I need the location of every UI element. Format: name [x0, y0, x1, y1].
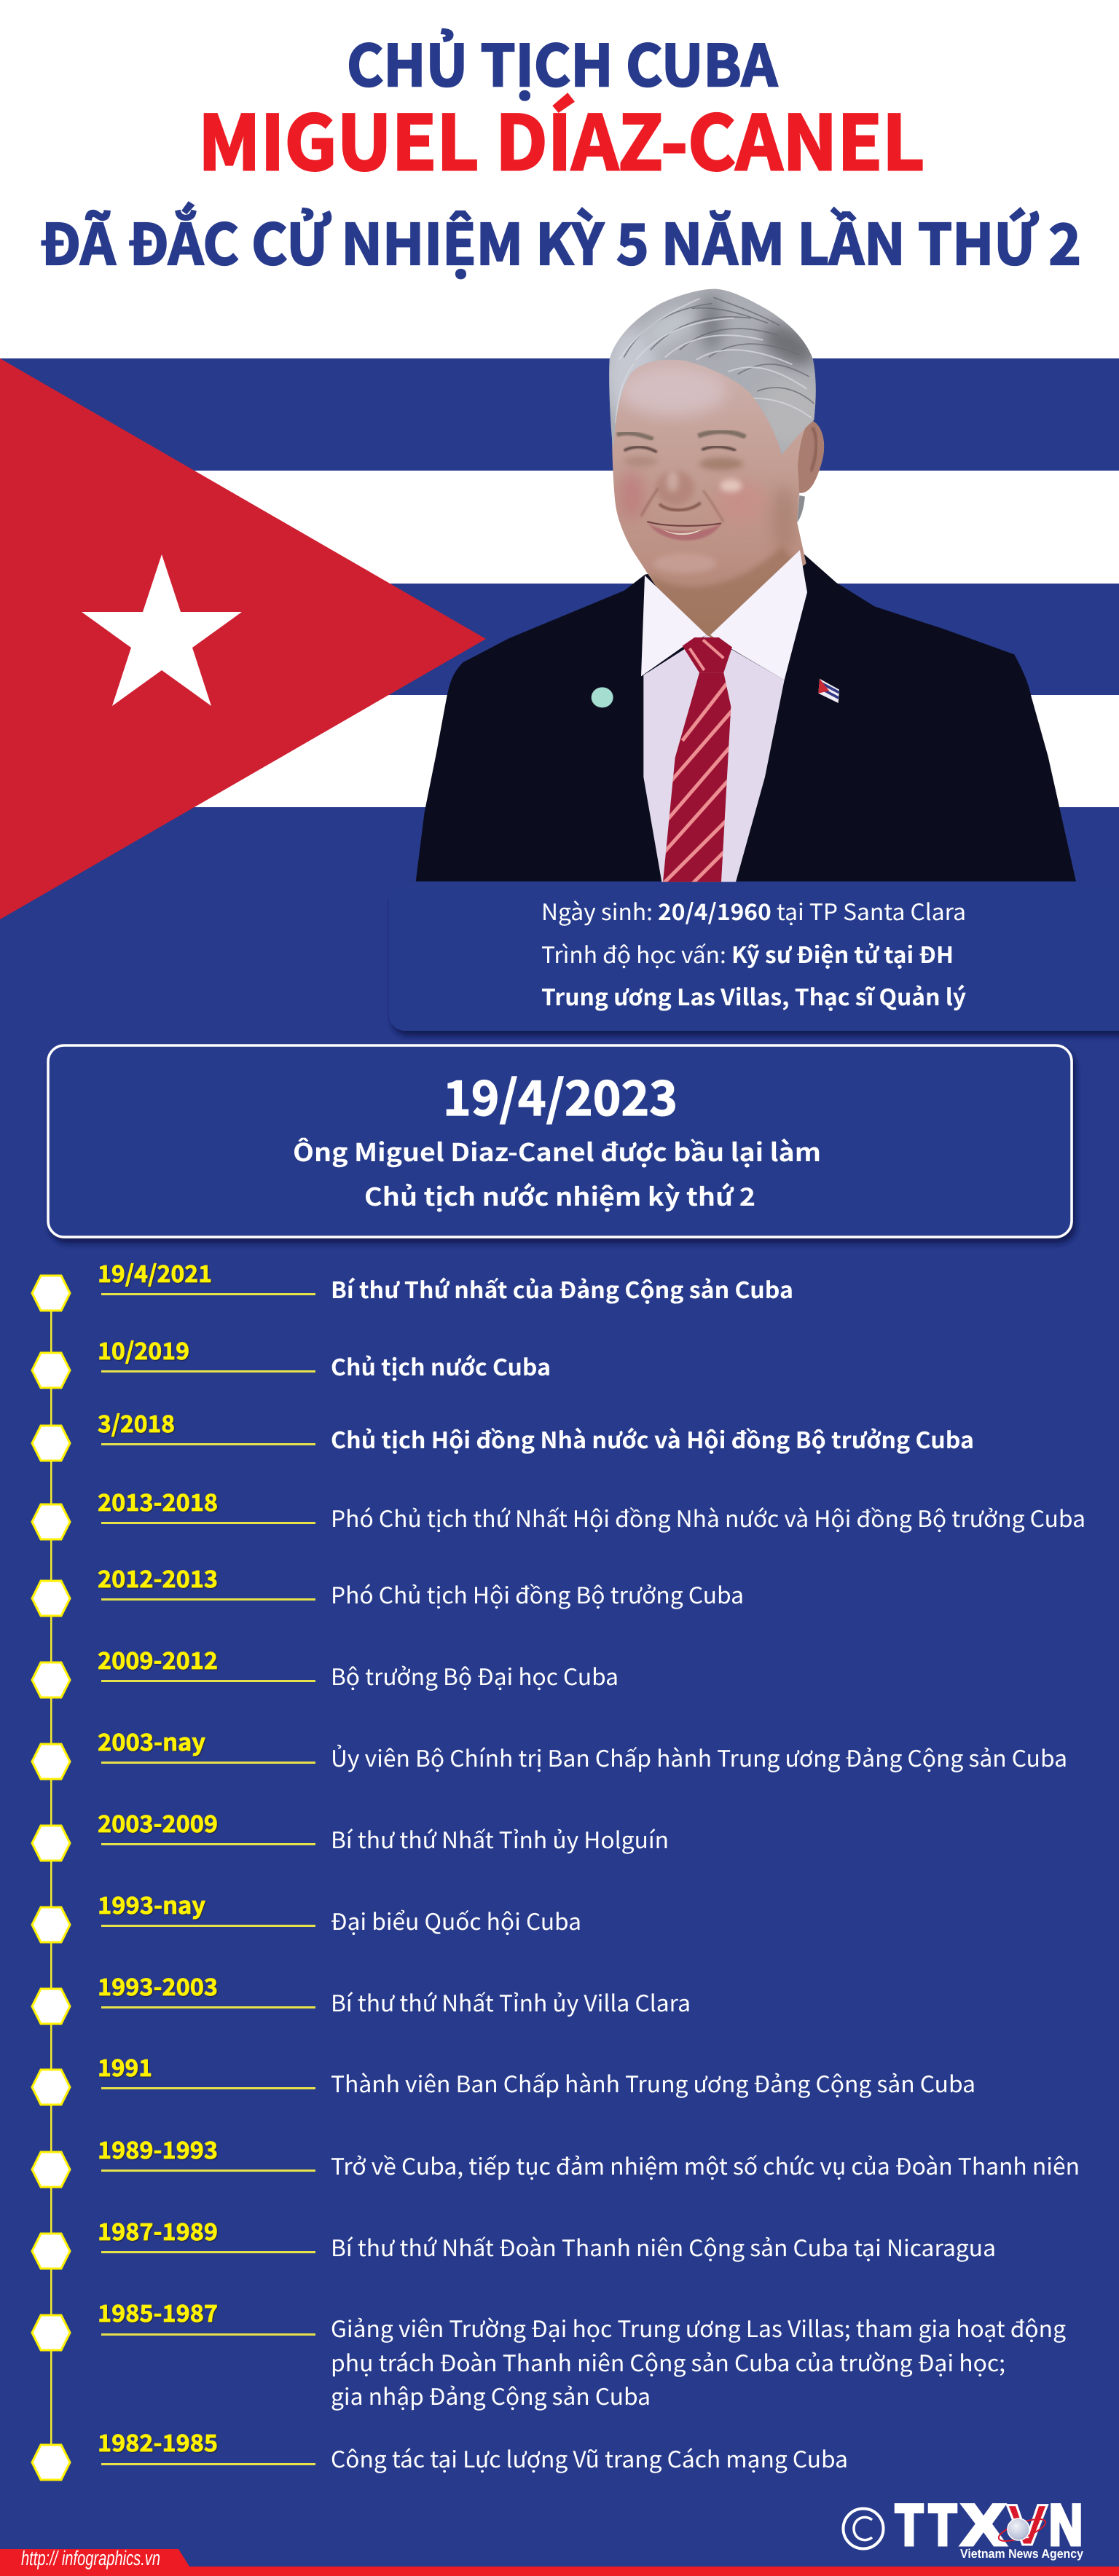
timeline item: 2009-2012 [32, 1643, 619, 1697]
timeline item: 1985-1987 [32, 2296, 1067, 2411]
tie [663, 672, 731, 882]
logo: TTXVN Vietnam News Agency [844, 2492, 1084, 2561]
timeline item: 19/4/2021: 19/4/2021 [98, 1256, 212, 1289]
wordmark: X [962, 2492, 1005, 2557]
eyes [624, 447, 657, 452]
suit jacket [416, 551, 1076, 881]
timeline item: 2003-nay: Ủy viên Bộ Chính trị Ban Chấp hành Trung ương Đảng Cộng sản Cuba [331, 1740, 1067, 1773]
highlight text line 2: Chủ tịch nước nhiệm kỳ thứ 2 [364, 1177, 755, 1213]
timeline item: 1987-1989 [32, 2214, 996, 2269]
title block [40, 21, 1081, 281]
education line 1: Trình độ học vấn: Kỹ sư Điện tử tại ĐH [541, 937, 954, 970]
portrait of Miguel Díaz-Canel [416, 284, 1076, 884]
timeline item: 1991 [32, 2050, 975, 2105]
wordmark [895, 2492, 1083, 2557]
birth info: Ngày sinh: 20/4/1960 tại TP Santa Clara [541, 894, 966, 927]
title line 1: CHỦ TỊCH CUBA [347, 21, 778, 103]
flag red triangle [0, 358, 486, 919]
flag white star [82, 554, 242, 706]
timeline item: 2012-2013 [32, 1561, 744, 1616]
timeline item: 1993-2003 [32, 1969, 691, 2024]
timeline item: 3/2018 [32, 1406, 974, 1461]
timeline item: 1982-1985: 1982-1985 [98, 2425, 218, 2459]
wordmark: T [895, 2492, 923, 2557]
timeline item: 1993-nay: Đại biểu Quốc hội Cuba [331, 1904, 581, 1936]
timeline item: 1987-1989: Bí thư thứ Nhất Đoàn Thanh niên Cộng sản Cuba tại Nicaragua [331, 2230, 996, 2263]
timeline item: 2003-2009: 2003-2009 [98, 1806, 218, 1839]
timeline item: 2003-nay: 2003-nay [98, 1724, 205, 1758]
timeline item: 1993-nay: 1993-nay [98, 1888, 205, 1921]
side hair below ear [797, 495, 805, 522]
title line 2: name: MIGUEL DÍAZ-CANEL [198, 83, 924, 192]
timeline item: 19/4/2021 [32, 1256, 793, 1311]
timeline item: 3/2018: 3/2018 [98, 1406, 175, 1440]
agency name: Vietnam News Agency [960, 2547, 1084, 2561]
ear [798, 420, 824, 493]
timeline item: 1991: 1991 [98, 2050, 152, 2084]
right collar [710, 550, 807, 680]
timeline item: 10/2019 [32, 1333, 551, 1388]
timeline item: 3/2018: Chủ tịch Hội đồng Nhà nước và Hội đồng Bộ trưởng Cuba [331, 1422, 974, 1455]
timeline item: 2012-2013: Phó Chủ tịch Hội đồng Bộ trưởng Cuba [331, 1577, 744, 1610]
timeline item: 1982-1985 [32, 2425, 848, 2480]
timeline item: 1982-1985: Công tác tại Lực lượng Vũ trang Cách mạng Cuba [331, 2441, 848, 2474]
timeline item: 1985-1987: 1985-1987 [98, 2296, 218, 2329]
timeline item: 2013-2018: 2013-2018 [98, 1485, 218, 1518]
mouth [647, 522, 721, 541]
hair [605, 284, 823, 459]
timeline item: 2009-2012: 2009-2012 [98, 1643, 218, 1676]
face and neck [605, 284, 831, 646]
timeline item: 2012-2013: 2012-2013 [98, 1561, 218, 1595]
wordmark: T [929, 2492, 957, 2557]
wordmark: V [1007, 2492, 1048, 2557]
timeline item: 1991: Thành viên Ban Chấp hành Trung ương Đảng Cộng sản Cuba [331, 2066, 975, 2099]
brows [617, 433, 653, 439]
timeline vertical line [50, 1293, 52, 2462]
highlight date: 19/4/2023 [443, 1060, 678, 1130]
timeline item: 1993-2003: 1993-2003 [98, 1969, 218, 2003]
footer red bar with website [0, 2547, 1119, 2576]
timeline item: 1985-1987: gia nhập Đảng Cộng sản Cuba [331, 2379, 651, 2411]
timeline item: 1993-2003: Bí thư thứ Nhất Tỉnh ủy Villa Clara [331, 1985, 691, 2018]
timeline item: 1989-1993: Trở về Cuba, tiếp tục đảm nhiệm một số chức vụ của Đoàn Thanh niên [331, 2148, 1080, 2181]
timeline item: 2003-2009 [32, 1806, 669, 1861]
timeline item: 1989-1993 [32, 2132, 1080, 2187]
timeline item: 10/2019: 10/2019 [98, 1333, 189, 1367]
website url: http:// infographics.vn [21, 2547, 160, 2569]
timeline item: 2013-2018: Phó Chủ tịch thứ Nhất Hội đồng Nhà nước và Hội đồng Bộ trưởng Cuba [331, 1501, 1085, 1534]
timeline item: 1985-1987: Giảng viên Trường Đại học Trung ương Las Villas; tham gia hoạt động [331, 2311, 1067, 2344]
left collar [641, 576, 707, 676]
wordmark: N [1049, 2492, 1083, 2557]
lapel pin: round badge [592, 687, 613, 707]
timeline item: 2013-2018 [32, 1485, 1085, 1539]
timeline item: 2003-nay [32, 1724, 1067, 1779]
timeline item: 1985-1987: phụ trách Đoàn Thanh niên Cộng sản Cuba của trường Đại học; [331, 2345, 1005, 2378]
timeline item: 1993-nay [32, 1888, 581, 1942]
lapel pin: Cuban flag [818, 679, 839, 703]
shirt, collar and tie [592, 550, 839, 884]
timeline item: 1989-1993: 1989-1993 [98, 2132, 218, 2166]
title line 3: ĐÃ ĐẮC CỬ NHIỆM KỲ 5 NĂM LẦN THỨ 2 [40, 200, 1081, 281]
globe and orbit [997, 2515, 1048, 2545]
copyright symbol [844, 2509, 883, 2548]
education line 2: Trung ương Las Villas, Thạc sĩ Quản lý [541, 979, 966, 1012]
timeline item: 2003-2009: Bí thư thứ Nhất Tỉnh ủy Holguín [331, 1822, 669, 1855]
highlight text line 1: Ông Miguel Diaz-Canel được bầu lại làm [293, 1133, 821, 1169]
highlight panel: 19/4/2023 [48, 1045, 1072, 1237]
nose [656, 471, 694, 506]
personal info panel [389, 882, 1119, 1031]
timeline item: 2009-2012: Bộ trưởng Bộ Đại học Cuba [331, 1659, 619, 1692]
timeline item: 19/4/2021: Bí thư Thứ nhất của Đảng Cộng sản Cuba [331, 1272, 793, 1305]
timeline item: 10/2019: Chủ tịch nước Cuba [331, 1349, 551, 1382]
timeline item: 1987-1989: 1987-1989 [98, 2214, 218, 2247]
